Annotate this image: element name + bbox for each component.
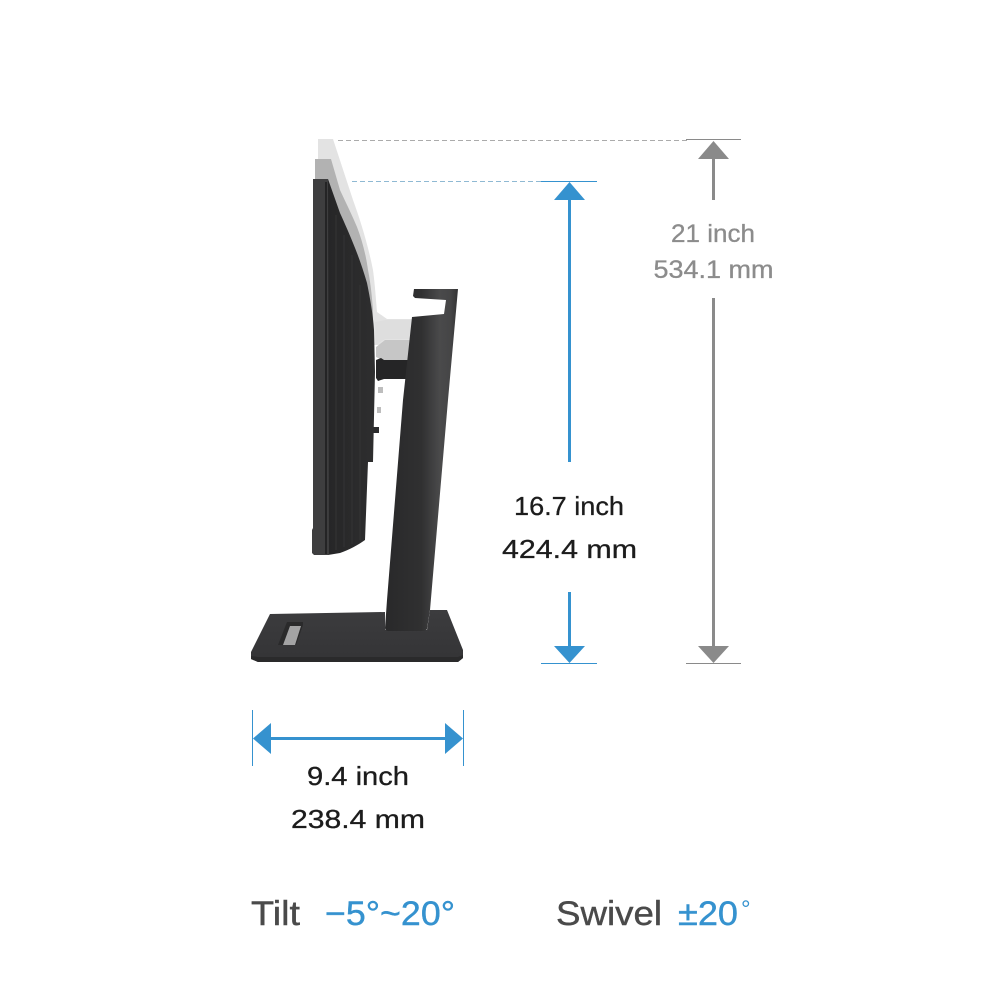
base width dimension: blue arrow [252, 710, 464, 834]
label: base width: 238.4 mm [291, 804, 425, 834]
dashed guide lines [338, 140, 690, 182]
label: min height [502, 491, 637, 564]
monitor front bezel [312, 179, 329, 555]
label: max height [654, 220, 774, 284]
back cover vertical texture [336, 215, 360, 550]
base front edge [251, 655, 463, 662]
monitor side view [251, 139, 463, 662]
height dimension min: blue arrow [502, 182, 637, 664]
small ports behind monitor [377, 387, 383, 413]
tilt spec [251, 895, 455, 933]
port connector [372, 427, 379, 433]
label: max height: 21 inch [671, 220, 755, 248]
swivel spec: ±20 [678, 895, 738, 933]
cable slot [278, 622, 303, 645]
label: min height: 424.4 mm [502, 534, 637, 564]
swivel spec: ° [741, 896, 751, 923]
label: base width: 9.4 inch [307, 761, 409, 791]
label: base width [291, 761, 425, 834]
ghost: middle position [315, 159, 373, 345]
label: min height: 16.7 inch [514, 491, 624, 521]
base [251, 610, 463, 662]
label: max height: 534.1 mm [654, 256, 774, 284]
cable slot highlight [283, 626, 301, 645]
stand hook and column [385, 289, 458, 631]
swivel spec [556, 895, 751, 933]
hinge ghost highlights [375, 320, 411, 345]
monitor back cover [328, 179, 375, 555]
ghost: highest raised position [318, 139, 412, 345]
tilt spec: −5°~20° [325, 895, 455, 933]
swivel spec: Swivel [556, 895, 662, 933]
height dimension max: grey arrow [654, 140, 774, 664]
hinge arm [376, 358, 412, 381]
tilt spec: Tilt [251, 895, 301, 933]
bezel ribbed seam [325, 182, 327, 554]
